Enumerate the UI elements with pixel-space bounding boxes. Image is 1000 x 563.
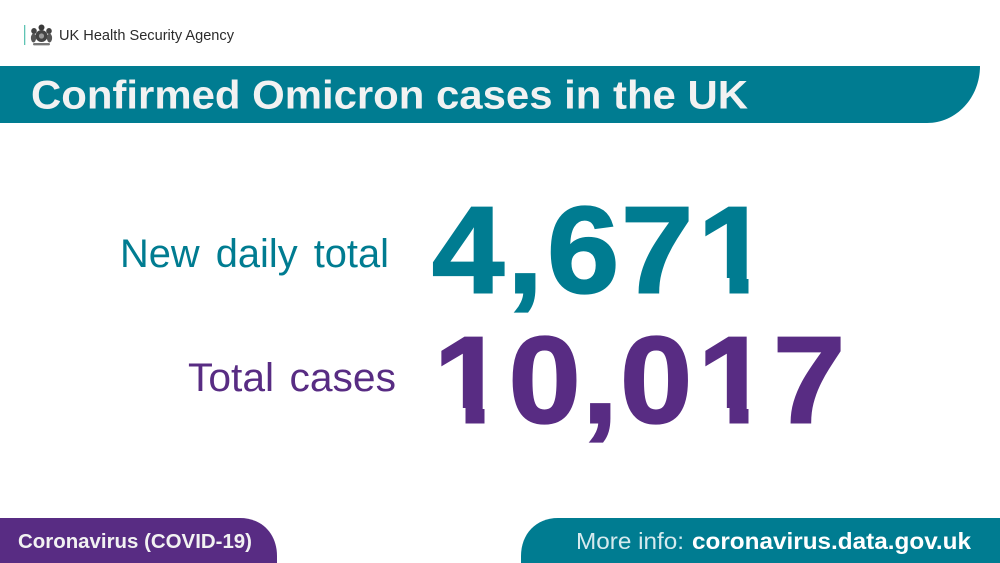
label: total cases: Total cases bbox=[188, 356, 396, 400]
icon: royal crest bbox=[31, 24, 52, 45]
footer tag: Coronavirus (COVID-19) bbox=[0, 518, 277, 563]
footer tag: more info bbox=[521, 518, 1000, 563]
url text: coronavirus.data.gov.uk bbox=[692, 528, 971, 554]
tag text: Coronavirus (COVID-19) bbox=[18, 531, 252, 553]
title banner bbox=[0, 66, 980, 123]
title: Confirmed Omicron cases in the UK bbox=[31, 74, 748, 118]
label: new daily total: New daily total bbox=[120, 232, 389, 276]
banner shape bbox=[0, 66, 980, 123]
logo text: UK Health Security Agency bbox=[59, 28, 235, 44]
number: 10,017: 10,017 bbox=[434, 311, 845, 449]
logo: UK Health Security Agency bbox=[24, 24, 235, 45]
logo accent line bbox=[24, 25, 25, 45]
stat: new daily total bbox=[120, 181, 772, 319]
stat: total cases bbox=[188, 311, 845, 449]
number: 4,671: 4,671 bbox=[432, 181, 770, 319]
more info text: More info: bbox=[576, 528, 684, 554]
teal tag shape bbox=[521, 518, 1000, 563]
purple tag shape bbox=[0, 518, 277, 563]
